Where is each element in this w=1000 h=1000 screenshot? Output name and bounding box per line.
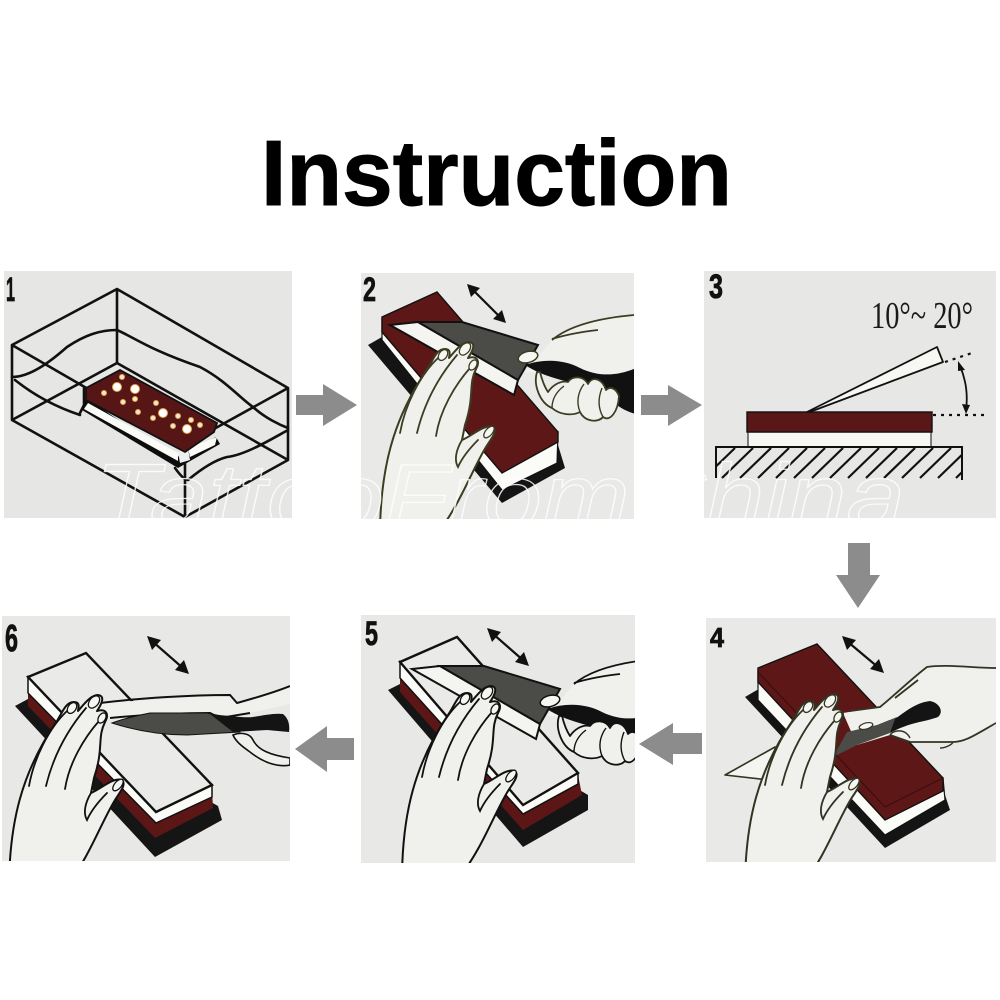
icon: right hand and knife [100, 686, 290, 766]
panel: step 1 soak stone in water: 1 [6, 271, 15, 309]
step number 5: 5 [365, 615, 378, 653]
angle indicator [933, 353, 988, 415]
icon: whetstone [368, 292, 565, 503]
arrow: step 4 to 5 [639, 723, 702, 765]
icon: double arrow [842, 636, 884, 673]
base with hatching [704, 447, 987, 480]
icon: left hand [8, 694, 125, 861]
panel: step 5 finish on white side [361, 615, 635, 863]
icon: left hand [402, 685, 518, 874]
icon: whetstone [388, 637, 588, 847]
arrow: step 1 to 2 [296, 384, 357, 426]
icon: whetstone [745, 644, 950, 848]
icon: right hand and knife [833, 666, 996, 757]
watermark: TattooFromChina [95, 446, 905, 548]
icon: double arrow [467, 284, 506, 323]
step number 6: 6 [5, 618, 18, 660]
panel: step 3 sharpening angle [704, 268, 996, 518]
panel: step 1 soak stone in water [4, 271, 292, 518]
icon: knife blade profile [807, 347, 943, 412]
arrow: step 5 to 6 [295, 726, 354, 772]
icon: double arrow [487, 628, 529, 666]
arrow: step 2 to 3 [641, 385, 702, 426]
whetstone side view [747, 412, 932, 447]
icon: water container [12, 289, 288, 517]
icon: left hand [744, 693, 860, 862]
step number 3: 3 [709, 268, 723, 306]
icon: knife held in right hand [412, 659, 658, 765]
title: Instruction [261, 121, 732, 225]
icon: left hand [380, 341, 496, 530]
icon: double arrow [147, 636, 189, 674]
icon: whetstone [15, 653, 222, 857]
icon: whetstone with bubbles [82, 370, 220, 468]
arrow: step 3 to 4 [836, 543, 880, 608]
water surface waves [12, 330, 288, 480]
step number 4: 4 [710, 622, 724, 653]
step number 2: 2 [363, 271, 376, 309]
panel: step 6 finish blade back on white side [2, 616, 290, 883]
icon: knife held in right hand [390, 315, 636, 421]
panel: step 4 sharpen blade back [706, 618, 996, 882]
panel: step 2 sharpen on red side [361, 271, 636, 530]
icon: knife tip [725, 747, 778, 781]
